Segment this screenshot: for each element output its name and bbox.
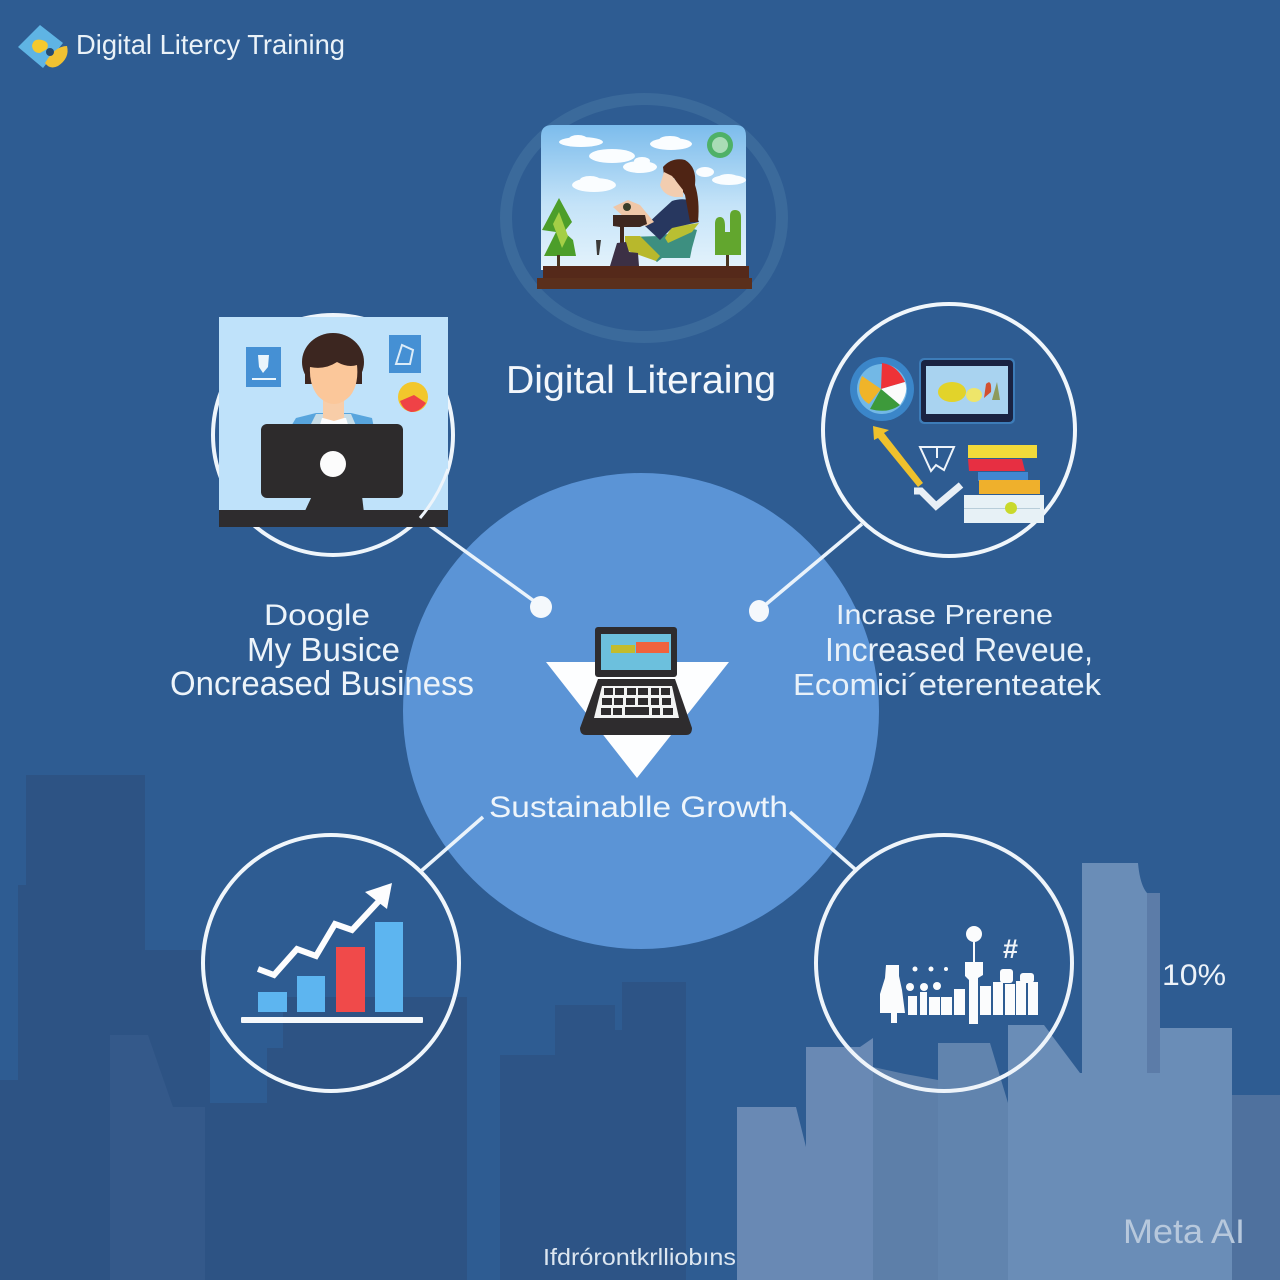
ring passing over panel	[420, 469, 448, 518]
tablet	[919, 358, 1015, 424]
torso	[645, 199, 699, 240]
central icon: triangle and laptop	[546, 627, 729, 778]
header title: Digital Litercy Training	[76, 29, 345, 60]
central label: Sustainablle Growth	[489, 791, 788, 824]
right label: Ecomici´eterenteatek	[793, 667, 1102, 702]
right label	[793, 599, 1102, 702]
small shield	[920, 447, 954, 471]
wooden shelf	[543, 266, 749, 278]
left top circle	[213, 315, 453, 555]
bar chart with rising arrow	[241, 883, 423, 1023]
hair	[663, 159, 699, 222]
face	[660, 172, 683, 197]
pie chart	[850, 357, 914, 421]
footer text: Ifdrórontkrlliobıns	[543, 1244, 736, 1270]
watermark: Meta AI	[1123, 1213, 1245, 1251]
monitor	[261, 424, 403, 498]
top illustration ring	[506, 99, 782, 337]
pencil arrow	[873, 426, 923, 487]
sky panel	[541, 125, 746, 270]
white city bars icon	[880, 926, 1038, 1024]
arm and hands	[613, 200, 654, 226]
left label: Oncreased Business	[170, 665, 474, 703]
central circle	[403, 473, 879, 949]
clouds	[559, 135, 746, 192]
right top circle	[823, 304, 1075, 556]
light city skyline	[737, 863, 1280, 1280]
icon tiles	[246, 347, 281, 387]
right label: Incrase Prerene	[836, 599, 1053, 630]
right label: Increased Reveue,	[825, 631, 1093, 668]
desk stand	[613, 215, 647, 243]
left label	[170, 599, 474, 703]
left illustration: person at computer	[219, 317, 448, 527]
right top illustration: charts, tablet, books	[850, 357, 1044, 523]
small hash mark: #	[1003, 934, 1018, 964]
person	[290, 413, 374, 428]
badge	[707, 132, 733, 158]
connector lines	[420, 520, 862, 872]
round tree	[715, 210, 741, 255]
check mark	[914, 485, 961, 506]
connector dots	[530, 596, 769, 622]
header logo	[18, 25, 68, 68]
chair and legs	[627, 228, 697, 262]
pine tree	[542, 198, 576, 256]
left label: Doogle	[264, 599, 370, 632]
top illustration: person at a desk	[537, 125, 752, 289]
small post	[596, 240, 601, 255]
bottom right circle	[816, 835, 1072, 1091]
books	[968, 445, 1037, 458]
percent label: 10%	[1162, 959, 1226, 992]
dark city skyline	[0, 775, 686, 1280]
heading: Digital Literacy centre: Digital Literaing	[506, 359, 776, 402]
pie badge	[398, 382, 428, 412]
bottom left circle	[203, 835, 459, 1091]
left label: My Busiсe	[247, 631, 400, 668]
